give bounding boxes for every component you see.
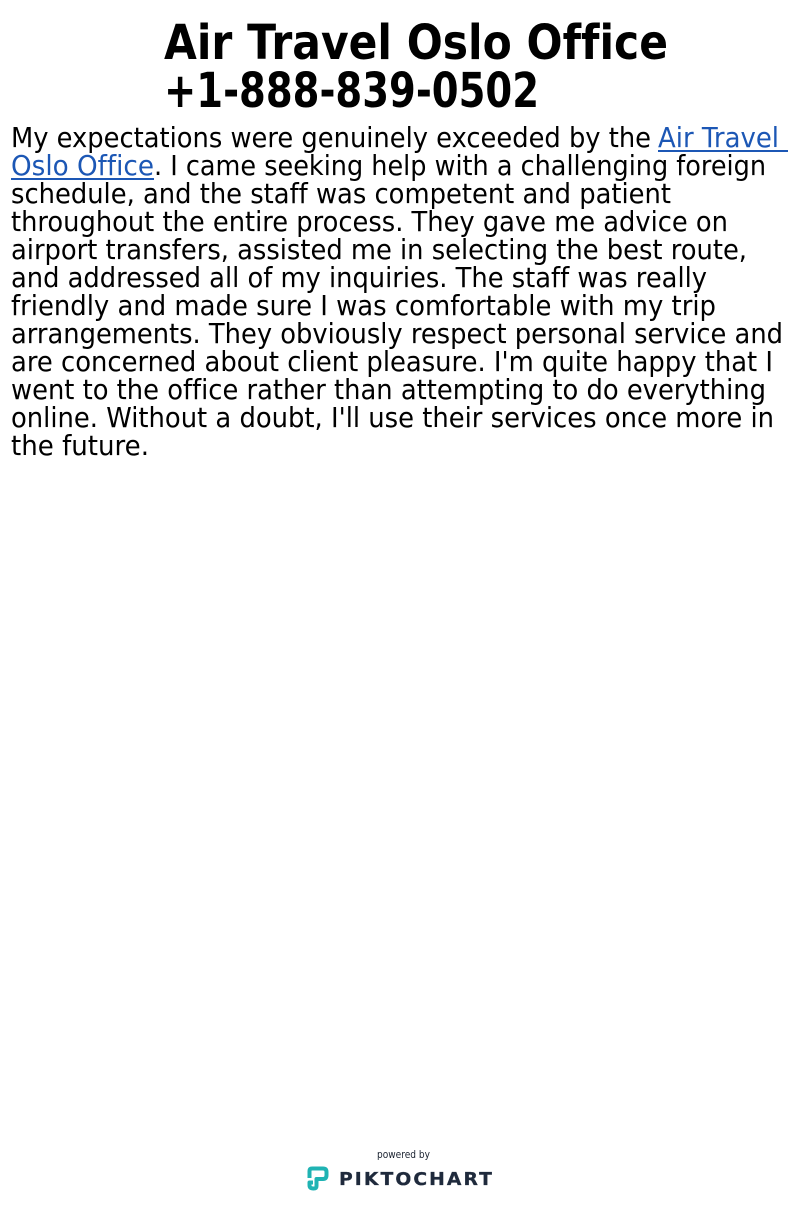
body text block: friendly and made sure I was comfortable with my trip	[11, 289, 716, 322]
body text block: My expectations were genuinely exceeded by the	[11, 121, 651, 154]
body text block: Air Travel	[658, 121, 779, 154]
body text block: schedule, and the staff was competent and patient	[11, 177, 671, 210]
footer: powered by Piktochart logo: powered by	[377, 1149, 430, 1161]
body text block: Oslo Office	[11, 149, 154, 182]
body text block	[11, 121, 788, 462]
body text block: the future.	[11, 429, 149, 462]
title: +1-888-839-0502	[164, 63, 539, 119]
body text block: throughout the entire process. They gave me advice on	[11, 205, 728, 238]
body text block: airport transfers, assisted me in selecting the best route,	[11, 233, 747, 266]
body text block: and addressed all of my inquiries. The staff was really	[11, 261, 707, 294]
title: Air Travel Oslo Office	[164, 15, 668, 71]
title	[164, 15, 668, 119]
icon: Piktochart P mark	[310, 1168, 326, 1188]
footer: powered by Piktochart logo: PIKTOCHART	[339, 1169, 494, 1190]
footer: powered by Piktochart logo	[310, 1149, 494, 1190]
